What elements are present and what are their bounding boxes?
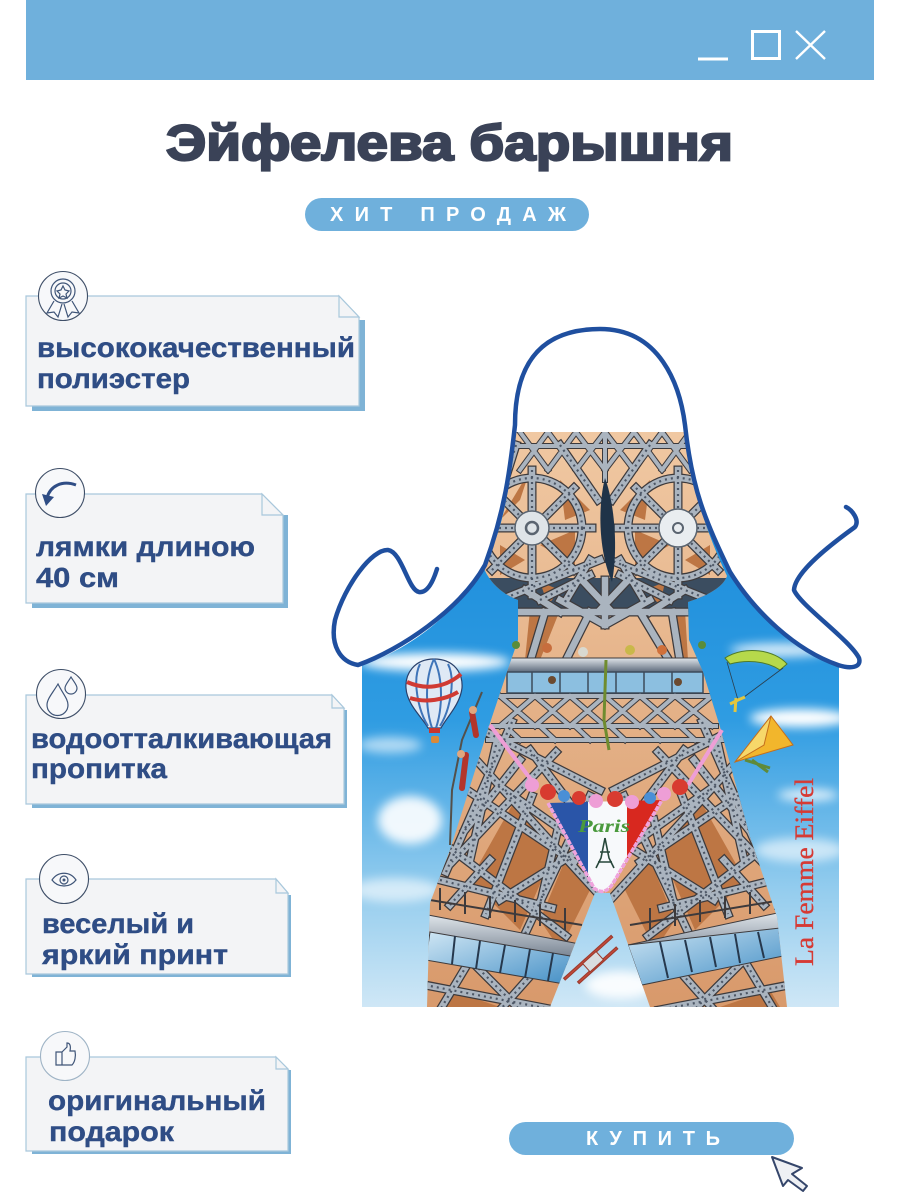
panel: quality xyxy=(26,272,365,411)
badge: hit xyxy=(305,198,589,231)
top window bar xyxy=(26,0,874,80)
text: gift xyxy=(48,1085,266,1147)
pennant with garland: Paris xyxy=(577,816,630,836)
title: Эйфелева барышня xyxy=(166,115,733,171)
icon: water drops xyxy=(36,670,86,718)
hang glider xyxy=(735,716,793,772)
text: water repellent: пропитка xyxy=(31,753,167,784)
icon: eye xyxy=(40,854,88,904)
icon: curved arrow xyxy=(36,468,84,518)
text: quality: высококачественный xyxy=(37,332,355,363)
badge: hit: ХИТ ПРОДАЖ xyxy=(330,204,567,226)
tower figure xyxy=(420,430,800,1010)
icon: window controls xyxy=(698,31,825,59)
darker upper shade band xyxy=(480,578,730,612)
icon: award rosette xyxy=(38,272,88,320)
text: water repellent xyxy=(31,723,332,784)
text: straps: 40 см xyxy=(36,562,119,593)
text: print: веселый и xyxy=(42,908,194,939)
little visitors on the tower xyxy=(450,641,706,845)
biplane xyxy=(564,935,621,989)
text: straps: лямки длиною xyxy=(36,531,255,562)
panel: gift xyxy=(26,1032,291,1154)
panel: water repellent xyxy=(26,670,347,808)
panel: straps xyxy=(26,468,288,608)
lattice layers xyxy=(425,432,789,1010)
hot air balloon xyxy=(406,659,462,743)
apron edge and straps xyxy=(334,329,859,667)
panel: print xyxy=(26,854,291,977)
text: straps xyxy=(36,531,255,593)
text: gift: подарок xyxy=(49,1116,175,1147)
text: print xyxy=(41,908,228,970)
text: gift: оригинальный xyxy=(48,1085,266,1116)
icon: cursor arrow xyxy=(772,1157,807,1191)
first platform xyxy=(505,658,705,672)
icon: thumbs up xyxy=(40,1032,90,1080)
steel rosette hubs xyxy=(515,478,697,582)
buy button: КУПИТЬ xyxy=(586,1128,720,1150)
pennant with garland xyxy=(490,725,722,895)
apron illustration xyxy=(334,329,859,1010)
text: quality: полиэстер xyxy=(37,363,190,394)
leg band left xyxy=(426,888,585,985)
text: water repellent: водоотталкивающая xyxy=(31,723,332,754)
buy button xyxy=(509,1122,794,1155)
apron sky background xyxy=(362,488,839,1007)
glass gallery xyxy=(507,672,703,693)
print label: La Femme Eiffel xyxy=(790,778,819,966)
leg band right xyxy=(628,888,788,985)
paraglider xyxy=(725,650,787,712)
text: quality xyxy=(37,332,355,394)
text: print: яркий принт xyxy=(41,939,228,970)
